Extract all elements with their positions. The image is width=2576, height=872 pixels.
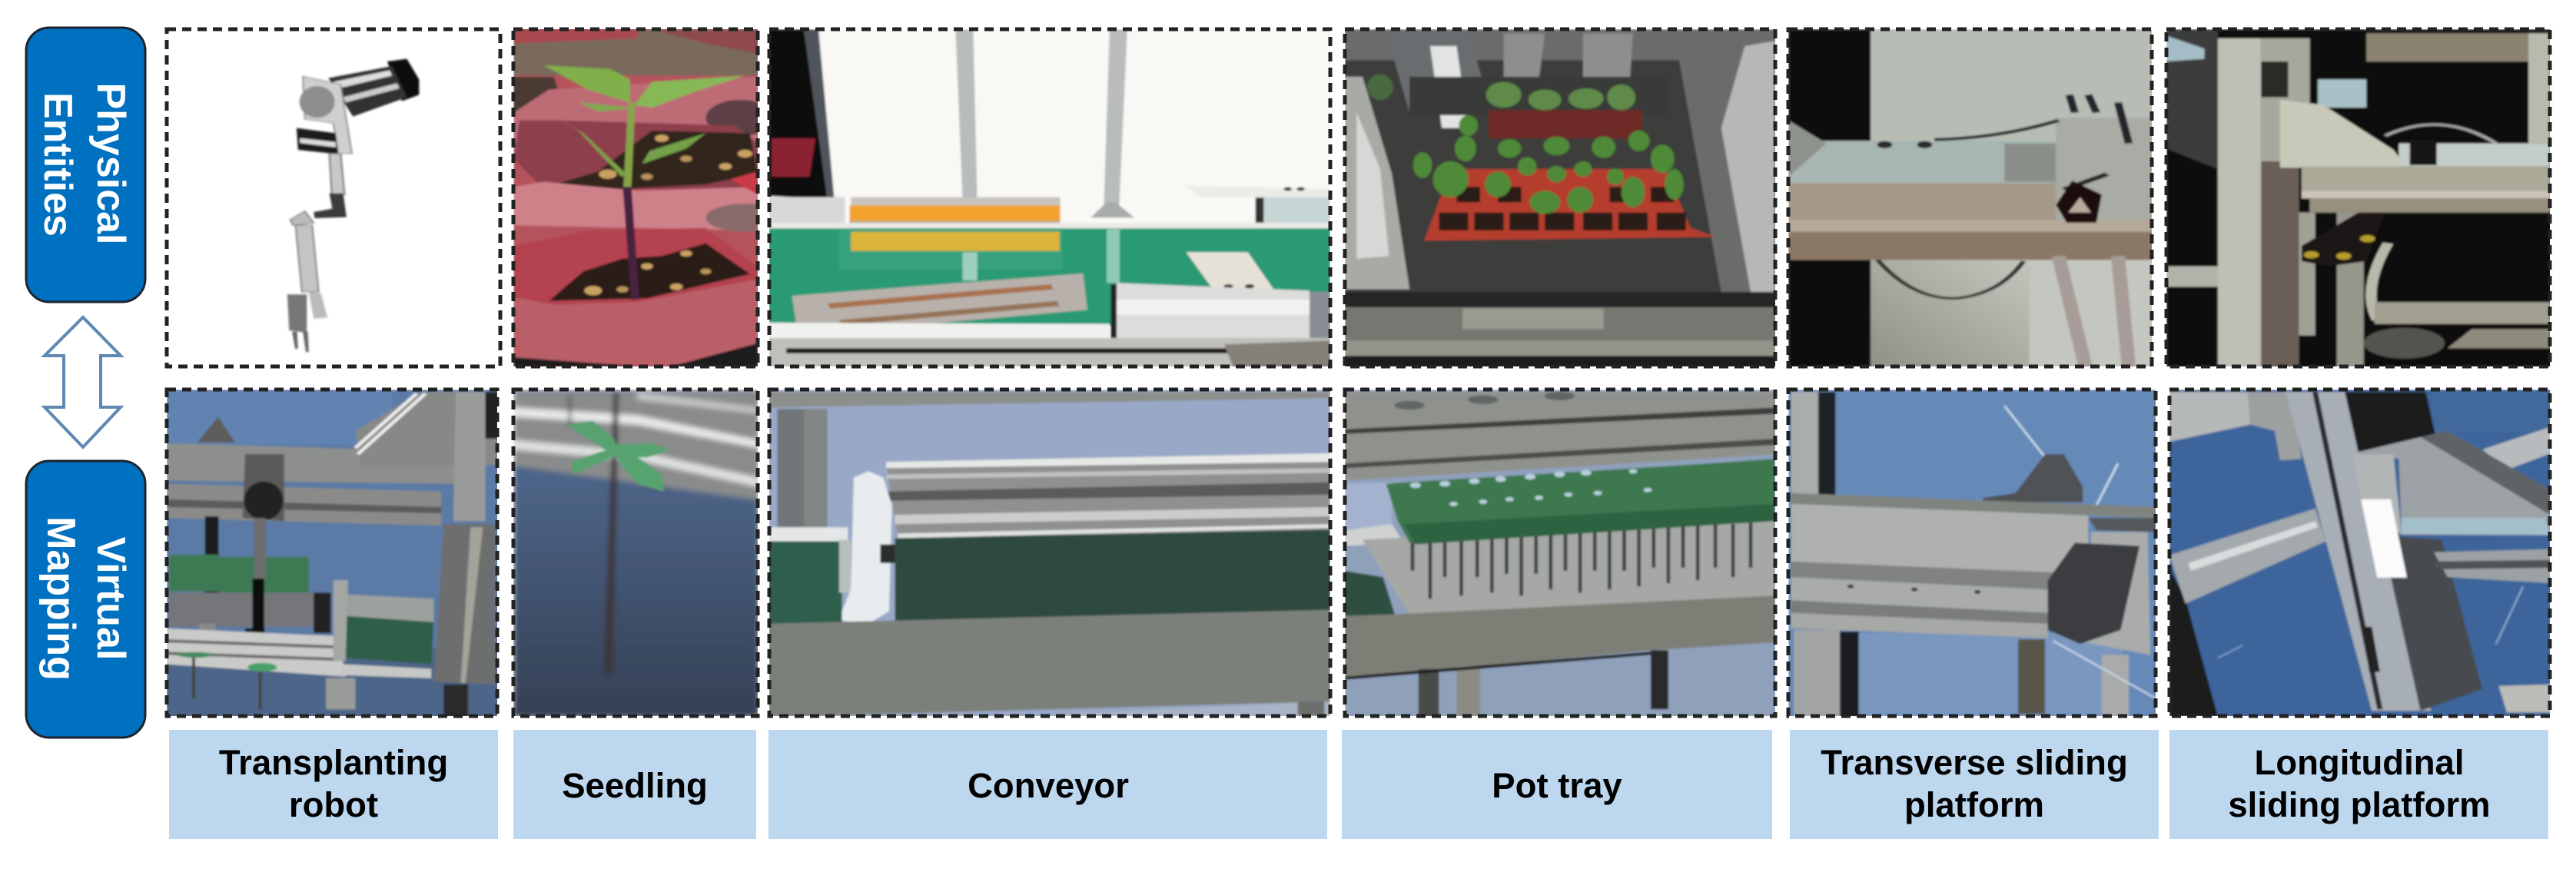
- label: Conveyor: Conveyor: [968, 766, 1129, 805]
- panel: pot tray virtual model: [1345, 390, 1777, 717]
- panel: conveyor virtual model: [768, 390, 1330, 717]
- panel: transplanting robot physical: [167, 29, 500, 366]
- label: Transplanting robot: robot: [289, 785, 378, 824]
- label: Seedling: [513, 730, 756, 839]
- label: Longitudinal sliding platform: [2169, 730, 2548, 839]
- label: Pot tray: [1342, 730, 1772, 839]
- panel: transverse sliding platform virtual model: [1788, 390, 2159, 717]
- icon: robot arm drawing: [287, 59, 419, 352]
- label: Seedling: Seedling: [562, 766, 708, 805]
- panel: transplanting robot virtual model: [167, 390, 500, 717]
- panel: longitudinal sliding platform virtual model: [2169, 390, 2553, 717]
- row label: Physical Entities: Entities: [35, 92, 80, 237]
- row label: Virtual Mapping: Virtual: [88, 537, 133, 660]
- panel: seedling physical photo: [513, 27, 784, 367]
- label: Transverse sliding platform: platform: [1904, 785, 2044, 824]
- panel: transverse sliding platform physical photo: [1788, 29, 2156, 367]
- row label: Virtual Mapping: [26, 461, 145, 738]
- label: Transplanting robot: [169, 730, 498, 839]
- label: Transverse sliding platform: Transverse sliding: [1821, 743, 2128, 782]
- row label: Virtual Mapping: Mapping: [38, 516, 83, 681]
- label: Transverse sliding platform: [1790, 730, 2159, 839]
- label: Transplanting robot: Transplanting: [219, 743, 448, 782]
- panel: conveyor physical photo: [768, 29, 1330, 367]
- arrow: two-way mapping: [45, 317, 121, 447]
- row label: Physical Entities: Physical: [88, 82, 133, 245]
- label: Longitudinal sliding platform: Longitudinal: [2255, 743, 2464, 782]
- label: Pot tray: Pot tray: [1492, 766, 1622, 805]
- panel: longitudinal sliding platform physical photo: [2166, 29, 2553, 367]
- row label: Physical Entities: [26, 28, 145, 302]
- label: Longitudinal sliding platform: sliding platform: [2228, 785, 2491, 824]
- panel: seedling virtual model: [513, 390, 759, 717]
- label: Conveyor: [768, 730, 1327, 839]
- panel: pot tray physical photo: [1345, 29, 1777, 367]
